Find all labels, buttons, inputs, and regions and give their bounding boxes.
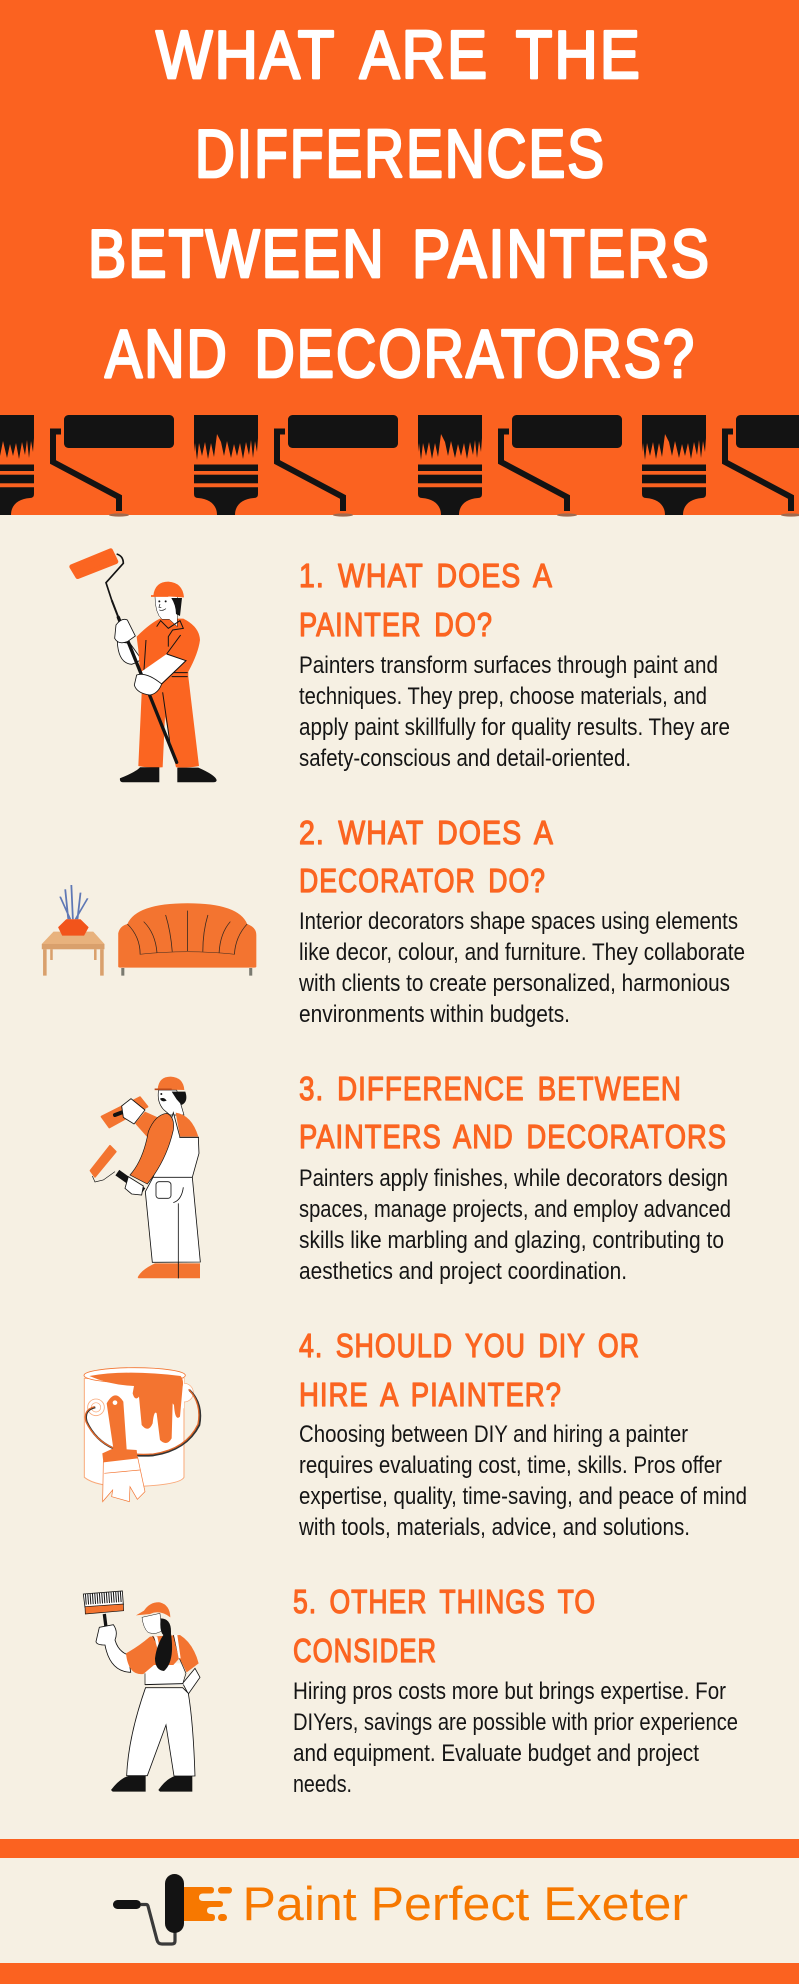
heading 5: CONSIDER: [293, 1632, 437, 1669]
heading 2: DECORATOR DO?: [299, 862, 546, 899]
body text 5: Hiring pros costs more but brings expertise. For: [293, 1678, 726, 1705]
footer: [0, 1839, 799, 1984]
heading 3: 3. DIFFERENCE BETWEEN: [299, 1070, 682, 1107]
section 5: other things to consider: [83, 1583, 738, 1798]
section 3: difference between painters and decorators: [91, 1070, 731, 1285]
heading 5: [293, 1583, 596, 1669]
body text 2: [298, 908, 745, 1028]
section 1: what does a painter do: [72, 551, 730, 782]
body text 5: and equipment. Evaluate budget and project: [293, 1740, 699, 1767]
heading 4: 4. SHOULD YOU DIY OR: [299, 1327, 640, 1364]
body text 1: [299, 652, 730, 772]
body text 4: with tools, materials, advice, and solutions.: [298, 1514, 690, 1541]
logo icon: paint roller: [113, 1874, 232, 1944]
body text 5: needs.: [293, 1771, 352, 1798]
body text 4: requires evaluating cost, time, skills. Pros offer: [299, 1452, 722, 1479]
illustration: paint bucket and brush: [84, 1368, 200, 1502]
heading 1: PAINTER DO?: [299, 606, 493, 643]
body text 1: safety-conscious and detail-oriented.: [299, 745, 631, 772]
heading 2: 2. WHAT DOES A: [299, 814, 554, 851]
heading 4: HIRE A PIAINTER?: [299, 1376, 562, 1413]
body text 1: Painters transform surfaces through paint and: [299, 652, 718, 679]
body text 3: skills like marbling and glazing, contributing to: [299, 1227, 724, 1254]
brand name: Paint Perfect Exeter: [242, 1878, 688, 1931]
title: DIFFERENCES: [195, 116, 606, 192]
body text 3: aesthetics and project coordination.: [299, 1258, 627, 1285]
heading 1: [299, 557, 553, 643]
illustration: woman with paint brush: [83, 1591, 200, 1792]
header panel: [0, 0, 799, 515]
body text 1: apply paint skillfully for quality results. They are: [299, 714, 730, 741]
section 2: what does a decorator do: [42, 814, 745, 1028]
heading 2: [299, 814, 554, 899]
brush and roller band: [0, 415, 799, 517]
illustration: sofa, table and plant: [42, 885, 256, 976]
body text 2: with clients to create personalized, harmonious: [298, 970, 730, 997]
section 4: should you diy or hire a painter: [84, 1327, 747, 1541]
body text 5: [293, 1678, 738, 1798]
body text 2: environments within budgets.: [299, 1001, 570, 1028]
title: WHAT ARE THE: [156, 17, 642, 93]
body text 3: [299, 1165, 731, 1285]
illustration: painter with long roller: [72, 551, 217, 782]
body text 4: [298, 1421, 747, 1541]
illustration: painter in overalls with two rollers: [91, 1077, 200, 1278]
heading 3: [299, 1070, 727, 1155]
heading 4: [299, 1327, 640, 1413]
body text 1: techniques. They prep, choose materials, and: [299, 683, 707, 710]
heading 5: 5. OTHER THINGS TO: [293, 1583, 596, 1620]
heading 1: 1. WHAT DOES A: [299, 557, 553, 594]
body text 4: Choosing between DIY and hiring a painter: [299, 1421, 688, 1448]
title: [88, 17, 711, 392]
